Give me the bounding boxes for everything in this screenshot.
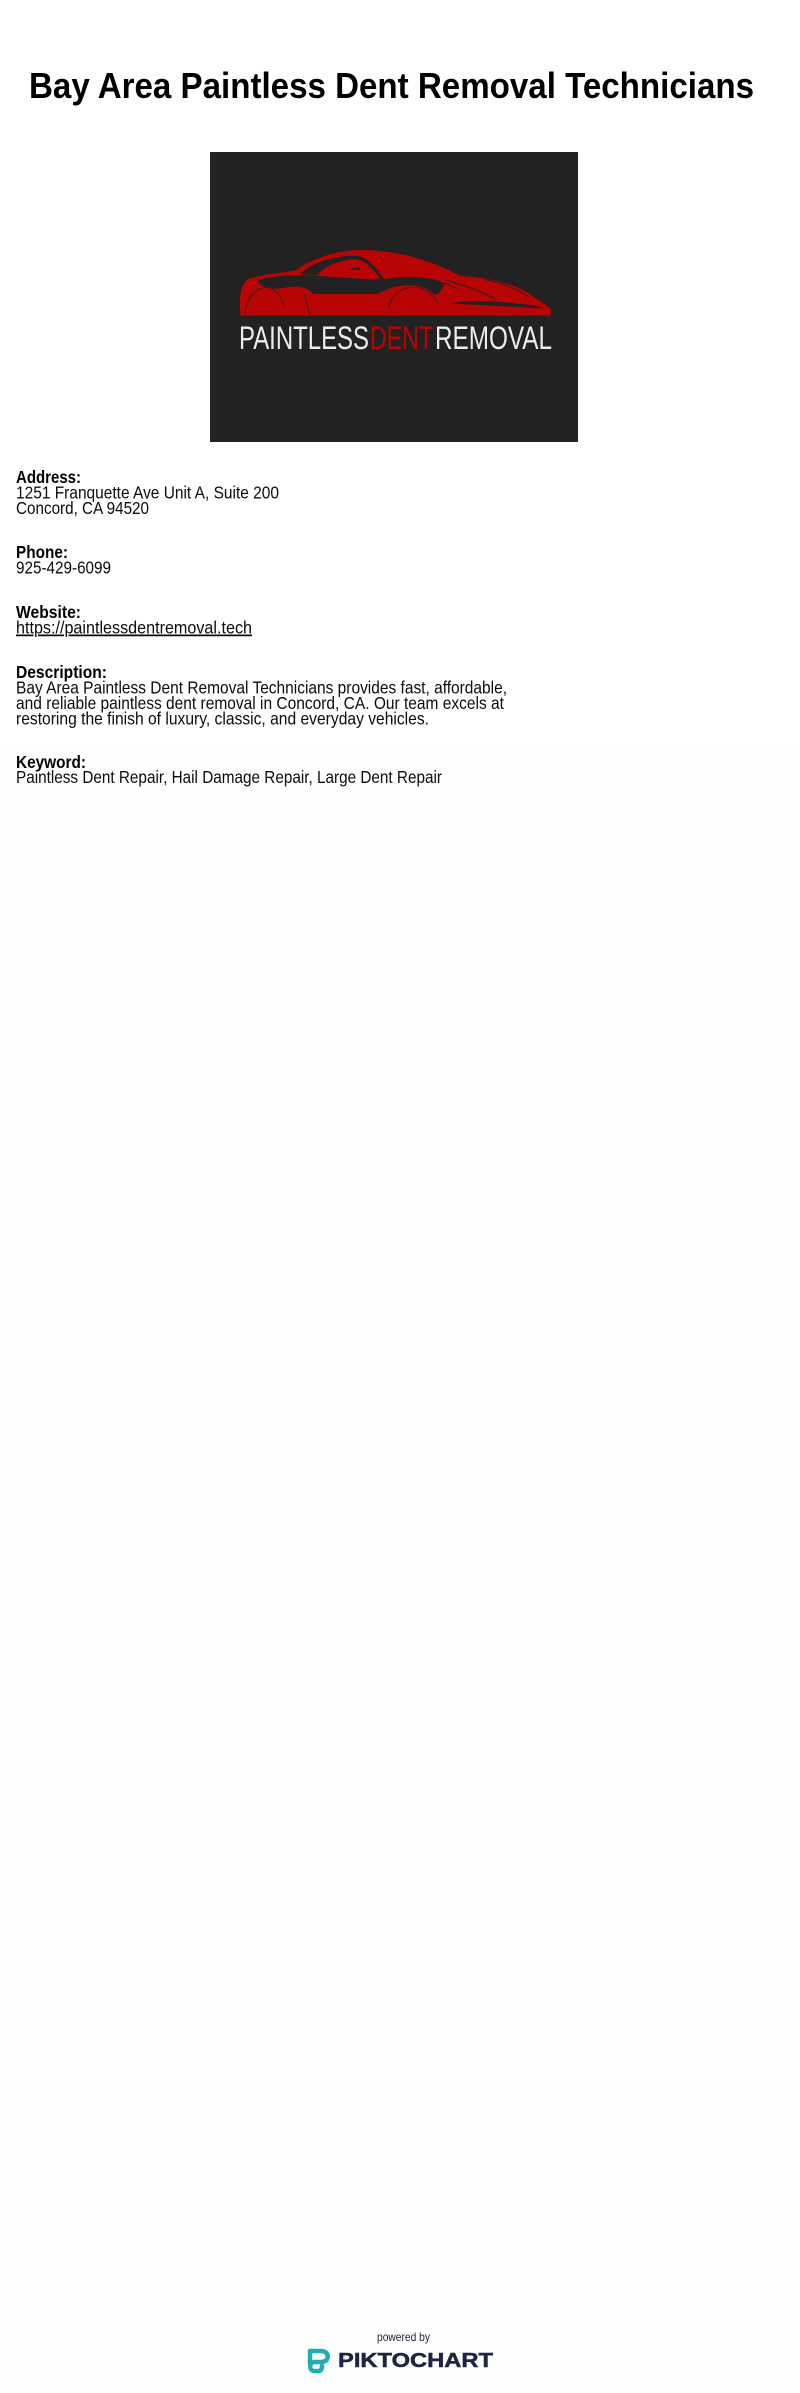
text block: keyword: Paintless Dent Repair, Hail Damage Repair, Large Dent Repair (16, 767, 442, 787)
text block: website (16, 602, 252, 638)
icon: Piktochart logo mark (310, 2351, 328, 2371)
text block: phone (16, 542, 111, 578)
text block: phone: Phone: (16, 542, 68, 562)
text block: description: Bay Area Paintless Dent Removal Technicians provides fast, affordable, (16, 678, 507, 698)
powered by label: powered by (377, 2330, 430, 2344)
text block: description: and reliable paintless dent removal in Concord, CA. Our team excels at (16, 693, 504, 713)
logo wordmark: REMOVAL (435, 320, 552, 356)
text block: description: Description: (16, 662, 107, 682)
text block: description (16, 662, 507, 728)
text block: address (16, 467, 279, 518)
logo wordmark: DENT (370, 320, 433, 356)
footer: powered by Piktochart (310, 2330, 493, 2372)
logo image panel (210, 152, 578, 442)
text block: phone: 925-429-6099 (16, 558, 111, 578)
text block: address: Address: (16, 467, 81, 487)
logo wordmark (239, 320, 552, 356)
text block: address: Concord, CA 94520 (16, 498, 149, 518)
text block: website: Website: (16, 602, 81, 622)
Piktochart wordmark: PIKTOCHART (338, 2350, 493, 2372)
icon: red sports car (240, 250, 551, 316)
text block: description: restoring the finish of luxury, classic, and everyday vehicles. (16, 708, 429, 728)
logo wordmark: PAINTLESS (239, 320, 369, 356)
text block: address: 1251 Franquette Ave Unit A, Suite 200 (16, 482, 279, 502)
text block: keyword: Keyword: (16, 752, 86, 772)
text block: website: https://paintlessdentremoval.tech (16, 618, 252, 638)
text block: keyword (16, 752, 442, 787)
title: Bay Area Paintless Dent Removal Technicians (29, 65, 754, 106)
